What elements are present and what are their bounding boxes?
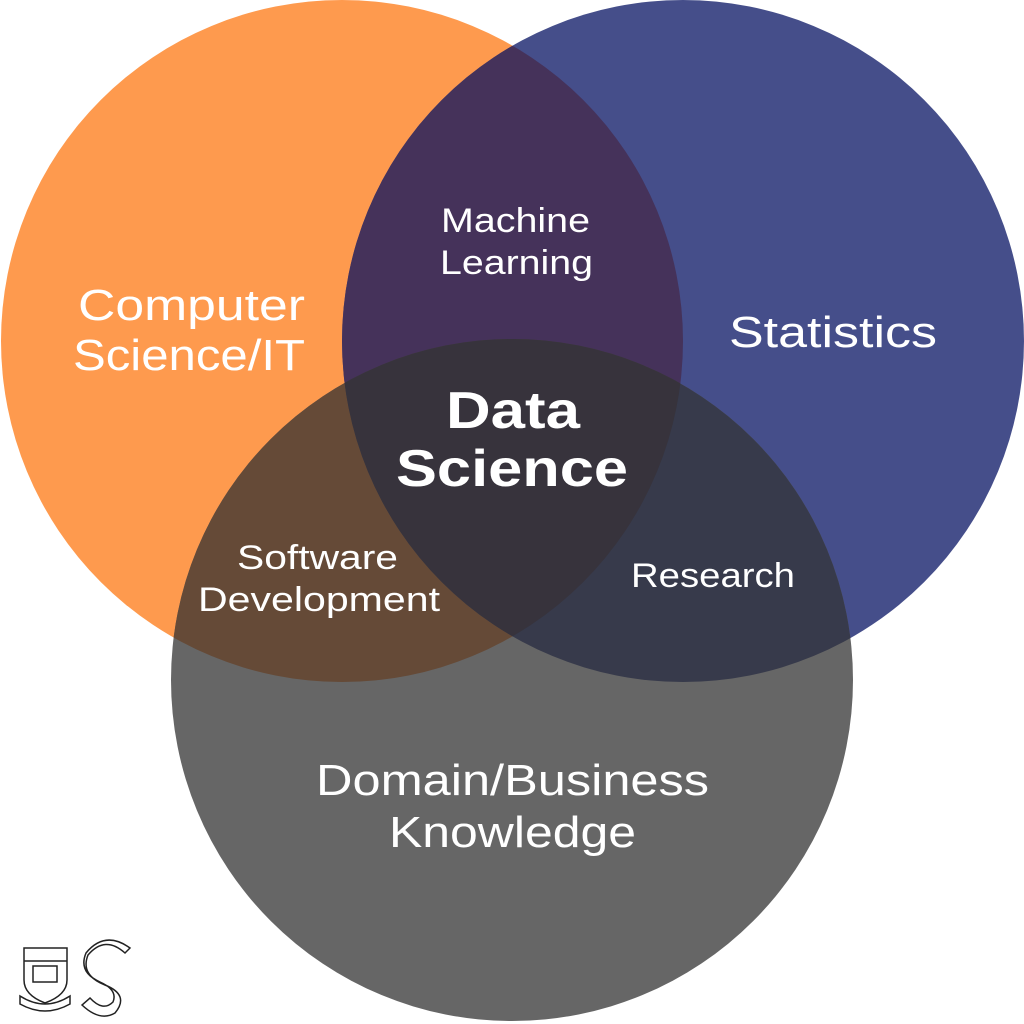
overlap: software development bbox=[174, 383, 512, 682]
overlap: machine learning bbox=[342, 46, 683, 384]
label: machine learning bbox=[440, 202, 593, 282]
circle: statistics bbox=[342, 0, 1024, 682]
circle: domain knowledge bbox=[171, 339, 853, 1021]
label: research: Research bbox=[631, 557, 795, 595]
label: machine learning: Learning bbox=[440, 244, 593, 282]
label: statistics: Statistics bbox=[729, 308, 937, 357]
label: domain knowledge: Knowledge bbox=[389, 808, 636, 857]
label: data science: Science bbox=[396, 440, 628, 498]
circle: computer science bbox=[1, 0, 683, 682]
overlap: research bbox=[344, 342, 850, 682]
label: domain knowledge bbox=[316, 756, 709, 857]
label: software development bbox=[198, 539, 441, 619]
label: machine learning: Machine bbox=[441, 202, 590, 240]
label: software development: Development bbox=[198, 581, 441, 619]
label: domain knowledge: Domain/Business bbox=[316, 756, 709, 805]
logo: university crest bbox=[20, 948, 70, 1011]
label: computer science: Science/IT bbox=[73, 331, 305, 380]
logo: S mark bbox=[82, 940, 130, 1016]
label: data science bbox=[396, 382, 628, 498]
overlap: data science center bbox=[344, 339, 680, 636]
label: data science: Data bbox=[446, 382, 581, 440]
label: computer science: Computer bbox=[78, 281, 305, 330]
label: computer science bbox=[73, 281, 305, 380]
label: software development: Software bbox=[237, 539, 398, 577]
